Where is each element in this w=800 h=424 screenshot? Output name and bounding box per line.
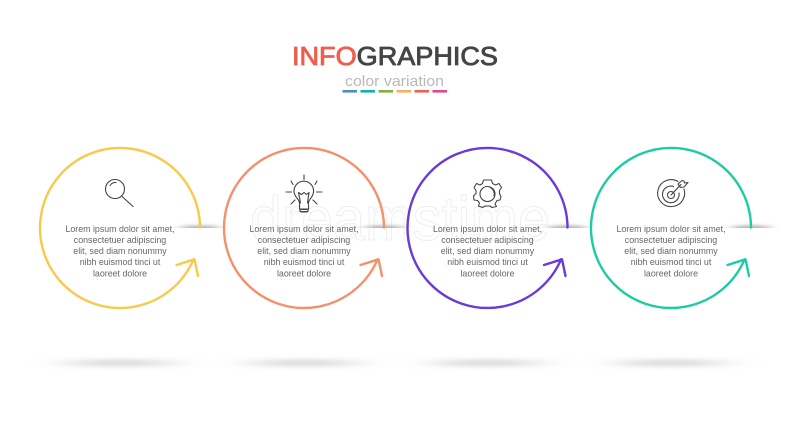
text block: nibh euismod tinci ut — [80, 257, 161, 267]
floor shadows — [65, 360, 726, 366]
text block: laoreet dolore — [644, 268, 698, 278]
text block: Lorem ipsum dolor sit amet, — [616, 224, 726, 234]
text block: nibh euismod tinci ut — [447, 257, 528, 267]
text block: consectetuer adipiscing — [258, 235, 350, 245]
text block: Lorem ipsum dolor sit amet, — [65, 224, 175, 234]
ring shadow — [180, 225, 220, 231]
icon: target — [658, 180, 688, 207]
icon: light bulb — [286, 175, 322, 212]
circular arrow — [591, 148, 751, 308]
ring shadow — [731, 225, 771, 231]
text block: consectetuer adipiscing — [625, 235, 717, 245]
panel: step 1 search — [40, 148, 220, 308]
text block: elit, sed diam nonummy — [441, 246, 535, 256]
circular arrow — [40, 148, 200, 308]
ring shadow — [364, 225, 404, 231]
text block: nibh euismod tinci ut — [264, 257, 345, 267]
text block: laoreet dolore — [93, 268, 147, 278]
circular arrow — [224, 148, 384, 308]
watermark: dreamstime — [250, 185, 550, 254]
text block: Lorem ipsum dolor sit amet, — [433, 224, 542, 234]
text block: consectetuer adipiscing — [74, 235, 166, 245]
text block: elit, sed diam nonummy — [624, 246, 718, 256]
title: INFOGRAPHICS — [292, 43, 498, 71]
icon: magnifier — [106, 180, 133, 206]
ring shadow — [547, 225, 587, 231]
text block: consectetuer adipiscing — [441, 235, 534, 245]
text block: elit, sed diam nonummy — [73, 246, 167, 256]
colour bars — [342, 90, 447, 93]
subtitle: color variation — [345, 73, 444, 90]
panel: step 3 settings — [408, 148, 587, 308]
text block — [249, 224, 359, 278]
panel: step 2 idea — [224, 148, 404, 308]
icon: gear — [474, 180, 502, 208]
text block: laoreet dolore — [277, 268, 331, 278]
text block: nibh euismod tinci ut — [631, 257, 712, 267]
text block: elit, sed diam nonummy — [257, 246, 351, 256]
panel: step 4 target — [591, 148, 771, 308]
text block: Lorem ipsum dolor sit amet, — [249, 224, 359, 234]
text block — [616, 224, 726, 278]
text block — [65, 224, 175, 278]
text block — [433, 224, 542, 278]
circular arrow — [408, 148, 568, 308]
text block: laoreet dolore — [460, 268, 515, 278]
